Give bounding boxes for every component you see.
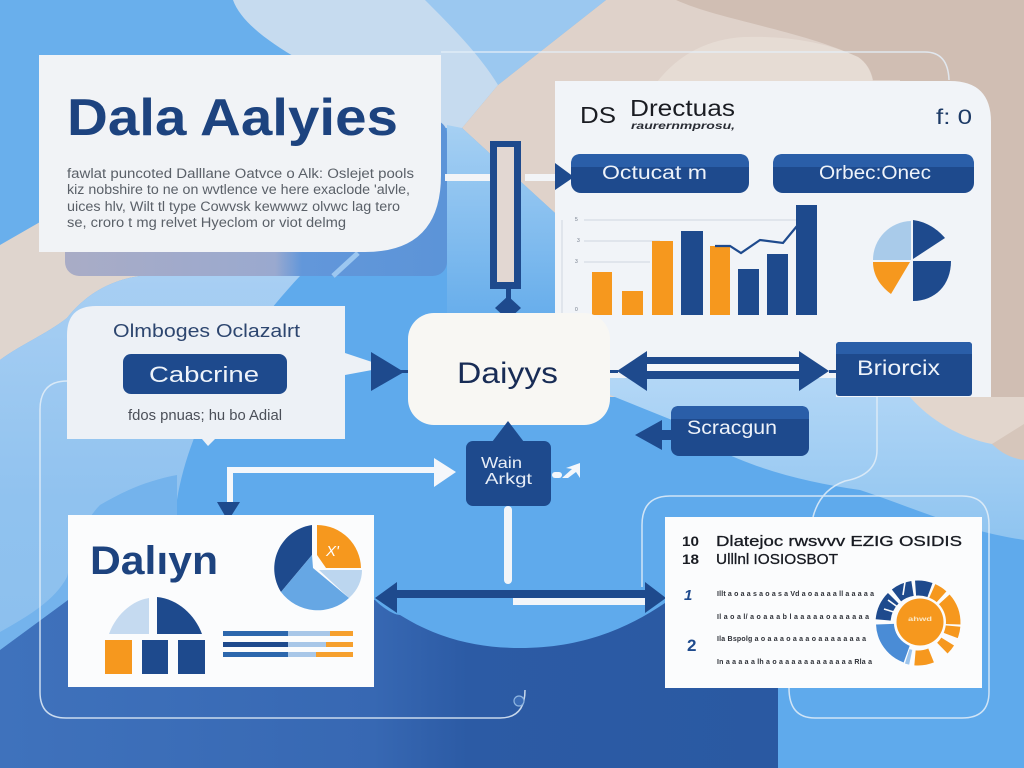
text block: description: kiz nobshire to ne on wvtlence ve here exaclode 'alvle, — [67, 182, 410, 197]
button with arrow: Scracgun: Scracgun — [687, 418, 777, 439]
list rows: Illt a o a a s a o a s a Vd a o a a a a ll a a a a a — [717, 591, 874, 598]
button: Briorcix: Briorcix — [857, 357, 941, 380]
text block: description — [67, 166, 414, 230]
button: Cabcrine — [123, 354, 287, 394]
legend bars — [223, 631, 353, 657]
arrow: input to centre — [371, 352, 408, 391]
button: left pill — [571, 154, 749, 193]
button: left pill: Octucat m — [602, 163, 707, 184]
panel: bottom left card — [68, 515, 374, 687]
panel: centre node — [408, 313, 610, 425]
icon: small arrow — [552, 463, 580, 478]
radial chart — [869, 574, 967, 672]
heading: title: Dala Aalyies — [67, 89, 398, 147]
list rows — [717, 591, 874, 666]
bar chart: 3 — [575, 259, 578, 265]
caption: fdos pnuas; hu bo Adial — [128, 407, 282, 424]
list rows: Ila Bspolg a o a a a o a a a o a a a a a a a a — [717, 636, 866, 643]
heading text: Dlatejoc rwsvvv EZIG OSIDIS — [716, 533, 962, 550]
button: Briorcix — [836, 342, 972, 396]
button: right pill: Orbec:Onec — [819, 163, 931, 184]
panel heading: Drectuas — [630, 95, 735, 121]
bar chart: 3 — [577, 238, 580, 244]
card heading: Olmboges Oclazalrt — [113, 321, 300, 341]
panel heading: DS — [580, 102, 616, 128]
radial chart: ahwd — [908, 617, 933, 623]
panel: dashboard card — [555, 81, 991, 397]
bar chart — [562, 205, 817, 315]
panel: bottom right card — [665, 517, 982, 688]
pie chart — [873, 220, 951, 301]
node: Wain Arkgt: Wain — [481, 455, 522, 472]
trend line — [715, 226, 797, 253]
panel heading: raurernmprosu, — [631, 121, 735, 132]
text block: description: fawlat puncoted Dalllane Oatvce o Alk: Oslejet pools — [67, 166, 414, 181]
heading numbers: 18 — [682, 551, 699, 567]
connector column — [490, 141, 521, 320]
heading text: Ulllnl IOSIOSBOT — [716, 551, 838, 568]
heading: Dalıyn — [90, 539, 218, 583]
heading text — [716, 533, 962, 568]
text block: description: se, croro t mg relvet Hyeclom or viot delmg — [67, 215, 346, 230]
arrow: white elbow — [217, 458, 456, 521]
list numbers: 1 — [684, 587, 692, 604]
list rows: Il a o a l/ a o a a a b l a a a a a o a a a a a a — [717, 614, 869, 621]
button with arrow: Scracgun — [635, 406, 809, 456]
pie chart: X' — [325, 543, 340, 560]
list rows: In a a a a a lh a o a a a a a a a a a a a a Rla a — [717, 659, 872, 666]
arrow: title to dashboard — [445, 163, 574, 190]
double arrow: centre to Briorcix — [610, 351, 837, 391]
button: Cabcrine: Cabcrine — [149, 362, 259, 387]
panel: centre node: Daiyys — [457, 357, 558, 390]
icon: half dome with blocks — [105, 597, 205, 674]
node: Wain Arkgt — [466, 421, 551, 506]
panel heading — [580, 95, 972, 132]
button: right pill — [773, 154, 974, 193]
list numbers — [684, 587, 696, 655]
bar chart: 0 — [575, 307, 578, 313]
panel: input card — [67, 306, 372, 446]
heading numbers: 10 — [682, 533, 699, 549]
list numbers: 2 — [687, 636, 696, 655]
double arrow: bottom — [375, 582, 666, 613]
heading numbers — [682, 533, 699, 567]
bar chart: 5 — [575, 217, 578, 223]
panel heading: f: 0 — [936, 106, 972, 129]
pie chart — [274, 525, 362, 610]
text block: description: uices hlv, Wilt tl type Cowvsk kewwwz olvwc lag tero — [67, 199, 400, 214]
node: Wain Arkgt: Arkgt — [485, 471, 533, 488]
connector: vertical white — [504, 506, 512, 584]
panel: title card — [39, 55, 441, 252]
shadow panel behind title card — [65, 120, 447, 276]
